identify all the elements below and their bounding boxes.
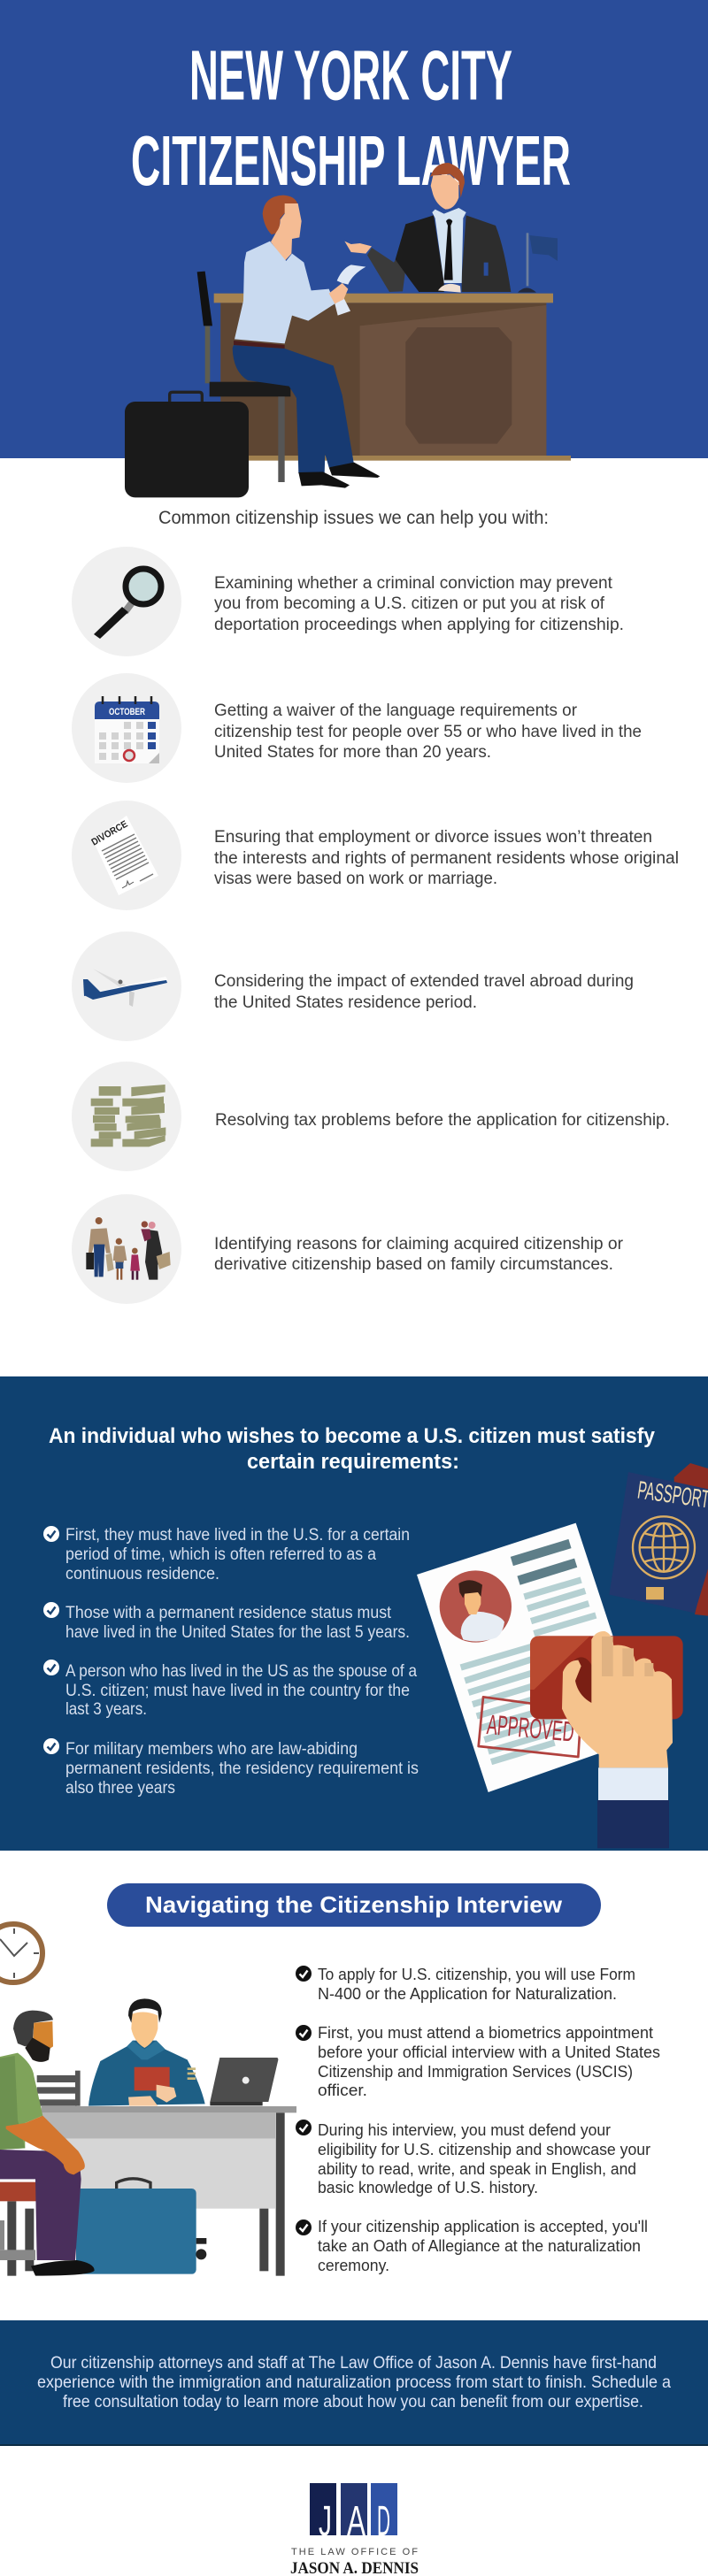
- text: Getting a waiver of the language requirements or: [214, 702, 578, 720]
- icon: family: [72, 1194, 181, 1304]
- step 2: officer.: [318, 2081, 367, 2099]
- text: Considering the impact of extended travel abroad during: [214, 972, 634, 991]
- list item: employment or divorce: [72, 801, 679, 910]
- requirement 1: [43, 1526, 410, 1583]
- requirement 2: [43, 1602, 410, 1642]
- illustration: stamp and hand: [530, 1631, 683, 1848]
- icon: divorce document: [72, 801, 181, 910]
- panel: requirements: [0, 1376, 708, 1851]
- desk: [214, 294, 571, 461]
- list item: tax problems: [72, 1062, 670, 1171]
- heading pill: navigating the interview: Navigating the Citizenship Interview: [145, 1891, 563, 1918]
- icon: divorce document: DIVORCE: [90, 819, 129, 848]
- suitcase: [125, 392, 249, 497]
- teal suitcase: [76, 2179, 206, 2274]
- scene: [0, 1998, 296, 2276]
- heading pill: navigating the interview: [107, 1883, 601, 1927]
- step 2: Citizenship and Immigration Services (USCIS): [318, 2062, 633, 2081]
- client: [233, 196, 380, 488]
- text: Identifying reasons for claiming acquired citizenship or: [214, 1235, 624, 1254]
- heading: An individual who wishes to become a U.S. citizen must satisfy: [49, 1424, 656, 1448]
- text: Examining whether a criminal conviction may prevent: [214, 574, 613, 593]
- icon: stacks of money: [72, 1062, 181, 1171]
- title: [131, 35, 571, 200]
- list item: travel abroad: [72, 932, 634, 1041]
- panel: call to action: free consultation today to learn more about how you can benefit from our expertise.: [63, 2393, 643, 2411]
- step 3: ability to read, write, and speak in English, and: [318, 2159, 636, 2178]
- text: the United States residence period.: [214, 993, 477, 1012]
- requirement 4: permanent residents, the residency requirement is: [65, 1760, 419, 1778]
- clock: [0, 1924, 42, 1982]
- text: derivative citizenship based on family circumstances.: [214, 1255, 613, 1274]
- officer: [88, 1998, 205, 2106]
- man seated: [0, 2011, 95, 2276]
- logo: D: [377, 2498, 390, 2545]
- requirement 3: A person who has lived in the US as the spouse of a: [65, 1662, 417, 1681]
- list item: family circumstances: [72, 1194, 624, 1304]
- step 3: [296, 2120, 650, 2196]
- icon: calendar: OCTOBER: [109, 707, 145, 717]
- logo: THE LAW OFFICE OF: [291, 2547, 418, 2557]
- panel: call to action: experience with the immigration and naturalization process from start to finish. Schedule a: [37, 2373, 671, 2392]
- heading: [49, 1424, 656, 1474]
- step 4: ceremony.: [318, 2256, 389, 2274]
- heading: certain requirements:: [247, 1450, 459, 1474]
- step 3: eligibility for U.S. citizenship and showcase your: [318, 2140, 650, 2158]
- illustration: lawyer and client at desk: [125, 163, 571, 497]
- requirement 1: First, they must have lived in the U.S. for a certain: [65, 1526, 410, 1545]
- step 4: [296, 2217, 648, 2274]
- requirement 3: U.S. citizen; must have lived in the country for the: [65, 1682, 410, 1700]
- list item: waiver: [72, 673, 642, 783]
- illustration: approved document: APPROVED: [486, 1708, 575, 1748]
- text: [214, 702, 642, 762]
- requirement 3: last 3 years.: [65, 1700, 147, 1719]
- intro text: Common citizenship issues we can help you with:: [158, 508, 549, 528]
- step 1: To apply for U.S. citizenship, you will use Form: [318, 1965, 635, 1983]
- text: United States for more than 20 years.: [214, 743, 491, 762]
- step 2: before your official interview with a United States: [318, 2043, 660, 2061]
- step 3: basic knowledge of U.S. history.: [318, 2178, 538, 2196]
- icon: airplane: [72, 932, 181, 1041]
- logo: [290, 2483, 419, 2576]
- icon: magnifying glass: [72, 547, 181, 656]
- requirement 3: [43, 1660, 417, 1719]
- text: [214, 828, 679, 888]
- requirement 4: For military members who are law-abiding: [65, 1740, 358, 1759]
- icon: calendar: [72, 673, 181, 783]
- requirement 1: period of time, which is often referred to as a: [65, 1545, 376, 1564]
- step 3: During his interview, you must defend your: [318, 2120, 611, 2139]
- text: the interests and rights of permanent residents whose original: [214, 849, 679, 868]
- step 2: [296, 2023, 660, 2099]
- list item: criminal conviction: [72, 547, 624, 656]
- illustration: passport: [609, 1463, 708, 1616]
- panel: call to action: [0, 2320, 708, 2446]
- requirement 1: continuous residence.: [65, 1565, 219, 1583]
- text: Ensuring that employment or divorce issues won’t threaten: [214, 828, 652, 847]
- lawyer: [344, 163, 511, 293]
- officer chair: [37, 2071, 81, 2106]
- illustration: citizenship interview: [0, 1924, 296, 2276]
- panel: hero background: [0, 0, 708, 458]
- panel: call to action: Our citizenship attorneys and staff at The Law Office of Jason A. Dennis have first-hand: [50, 2354, 657, 2373]
- flag: [518, 233, 558, 293]
- text: visas were based on work or marriage.: [214, 870, 497, 888]
- step 4: take an Oath of Allegiance at the naturalization: [318, 2236, 641, 2255]
- illustration: approved document: [417, 1523, 646, 1792]
- logo: A: [347, 2498, 366, 2545]
- step 1: [296, 1965, 635, 2003]
- requirement 4: [43, 1738, 419, 1798]
- text: [214, 972, 634, 1012]
- text: [214, 1235, 624, 1274]
- requirement 2: have lived in the United States for the last 5 years.: [65, 1623, 410, 1642]
- step 4: If your citizenship application is accepted, you'll: [318, 2217, 648, 2235]
- desk: [25, 2106, 296, 2276]
- step 1: N-400 or the Application for Naturalization.: [318, 1984, 617, 2003]
- step 2: First, you must attend a biometrics appointment: [318, 2023, 653, 2042]
- interview steps: [296, 1965, 660, 2274]
- laptop: [210, 2058, 278, 2105]
- requirement 2: Those with a permanent residence status must: [65, 1604, 392, 1622]
- text: deportation proceedings when applying for citizenship.: [214, 616, 624, 634]
- text: [214, 574, 624, 634]
- text: you from becoming a U.S. citizen or put you at risk of: [214, 594, 605, 613]
- text: citizenship test for people over 55 or who have lived in the: [214, 723, 642, 741]
- requirement 4: also three years: [65, 1779, 175, 1798]
- logo: J: [319, 2498, 332, 2545]
- text: Resolving tax problems before the application for citizenship.: [215, 1111, 670, 1130]
- chair: [197, 272, 290, 482]
